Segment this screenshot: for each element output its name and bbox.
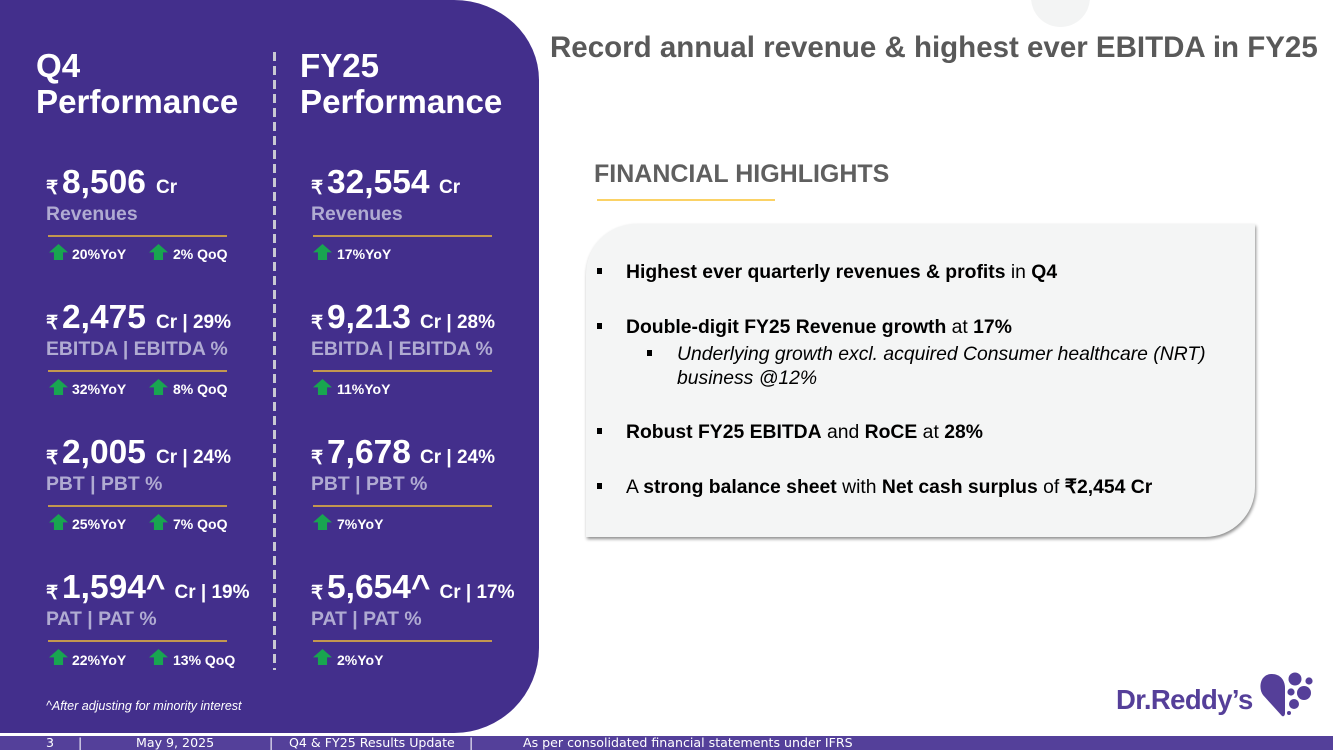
purple performance panel: 1,594^ [62, 569, 165, 606]
section heading: financial highlights: FINANCIAL HIGHLIGHTS [594, 160, 889, 188]
purple performance panel: 9,213 [327, 299, 411, 336]
purple performance panel: ₹ [46, 178, 58, 199]
purple performance panel: PAT | PAT % [311, 608, 422, 630]
purple performance panel: PAT | PAT % [46, 608, 157, 630]
logo: Dr. Reddy's [1116, 672, 1313, 716]
purple performance panel: 7,678 [327, 434, 411, 471]
panel: highlights card: Robust FY25 EBITDA and RoCE at 28% [626, 420, 983, 442]
purple performance panel: 7%YoY [337, 516, 383, 532]
footer bar: As per consolidated financial statements under IFRS [523, 735, 853, 750]
metric: FY25 PAT [311, 569, 515, 668]
logo: Dr. Reddy's: Dr.Reddy’s [1116, 684, 1253, 715]
metric: FY25 revenues [311, 164, 492, 262]
purple performance panel: 32,554 [327, 164, 429, 201]
purple performance panel: 25%YoY [72, 516, 126, 532]
heading: Q4 Performance: Q4 [36, 48, 80, 85]
metric: Q4 revenues [46, 164, 227, 262]
purple performance panel: 8,506 [62, 164, 146, 201]
heading: FY25 Performance: FY25 [300, 48, 379, 85]
title: Record annual revenue & highest ever EBITDA in FY25 [550, 31, 1318, 64]
panel: highlights card: Double-digit FY25 Revenue growth at 17% [626, 316, 1012, 338]
purple performance panel: ₹ [311, 583, 323, 604]
purple performance panel: Revenues [311, 203, 403, 225]
panel: highlights card: Highest ever quarterly revenues & profits in Q4 [626, 260, 1057, 282]
footer bar: 3 [46, 735, 54, 750]
bullet: EBITDA and RoCE [597, 420, 983, 442]
footer bar: May 9, 2025 [136, 735, 214, 750]
bullet: balance sheet [597, 476, 1152, 498]
purple performance panel: 13% QoQ [173, 652, 235, 668]
purple performance panel: ₹ [311, 313, 323, 334]
purple performance panel: EBITDA | EBITDA % [311, 338, 493, 360]
purple performance panel: Cr | 19% [174, 582, 250, 603]
dashed column divider [273, 52, 276, 670]
purple performance panel: 20%YoY [72, 246, 126, 262]
purple performance panel: Revenues [46, 203, 138, 225]
purple performance panel: Cr [439, 177, 460, 198]
purple performance panel: 7% QoQ [173, 516, 227, 532]
footer bar [0, 736, 1333, 750]
metric: FY25 PBT [311, 434, 495, 532]
panel: highlights card: business @12% [677, 366, 817, 388]
heading: Q4 Performance [36, 48, 238, 121]
panel: highlights card: A strong balance sheet with Net cash surplus of ₹2,454 Cr [626, 476, 1152, 498]
purple performance panel: 11%YoY [337, 381, 390, 397]
purple performance panel: Cr [156, 177, 177, 198]
purple performance panel: Cr | 24% [420, 447, 495, 468]
purple performance panel: 2,475 [62, 299, 146, 336]
metric: Q4 PAT [46, 569, 250, 668]
footer bar: | [469, 735, 473, 750]
panel: highlights card: Underlying growth excl. acquired Consumer healthcare (NRT) [677, 342, 1206, 364]
heading: Q4 Performance: Performance [36, 84, 238, 121]
sub-bullet: underlying growth [647, 342, 1206, 388]
footer bar: | [78, 735, 82, 750]
footer bar: Q4 & FY25 Results Update [289, 735, 455, 750]
purple performance panel: Cr | 24% [156, 447, 231, 468]
purple performance panel: ₹ [46, 313, 58, 334]
purple performance panel: 8% QoQ [173, 381, 227, 397]
purple performance panel: 22%YoY [72, 652, 126, 668]
decorative circle [1031, 0, 1090, 27]
purple performance panel: 32%YoY [72, 381, 126, 397]
heading underline [597, 199, 775, 201]
metric: FY25 EBITDA [311, 299, 495, 397]
bullet: revenue growth [597, 316, 1012, 338]
purple performance panel: PBT | PBT % [46, 473, 162, 495]
purple performance panel: 2%YoY [337, 652, 383, 668]
purple performance panel: ₹ [46, 448, 58, 469]
footnote: ^After adjusting for minority interest [46, 699, 242, 713]
purple performance panel: EBITDA | EBITDA % [46, 338, 228, 360]
heading: FY25 Performance [300, 48, 502, 121]
purple performance panel: ₹ [46, 583, 58, 604]
bullet: record quarter [597, 260, 1058, 282]
metric: Q4 EBITDA [46, 299, 231, 397]
icon: heart and dots [1260, 672, 1313, 716]
purple performance panel: 2% QoQ [173, 246, 227, 262]
purple performance panel [0, 0, 539, 733]
heading: FY25 Performance: Performance [300, 84, 502, 121]
purple performance panel: Cr | 28% [420, 312, 495, 333]
metric: Q4 PBT [46, 434, 231, 532]
purple performance panel: PBT | PBT % [311, 473, 427, 495]
purple performance panel: 5,654^ [327, 569, 430, 606]
purple performance panel: ₹ [311, 448, 323, 469]
purple performance panel: 17%YoY [337, 246, 391, 262]
panel: highlights card [586, 224, 1255, 537]
purple performance panel: Cr | 17% [440, 582, 515, 603]
footer bar: | [269, 735, 273, 750]
purple performance panel: 2,005 [62, 434, 146, 471]
purple performance panel: Cr | 29% [156, 312, 231, 333]
purple performance panel: ₹ [311, 178, 323, 199]
